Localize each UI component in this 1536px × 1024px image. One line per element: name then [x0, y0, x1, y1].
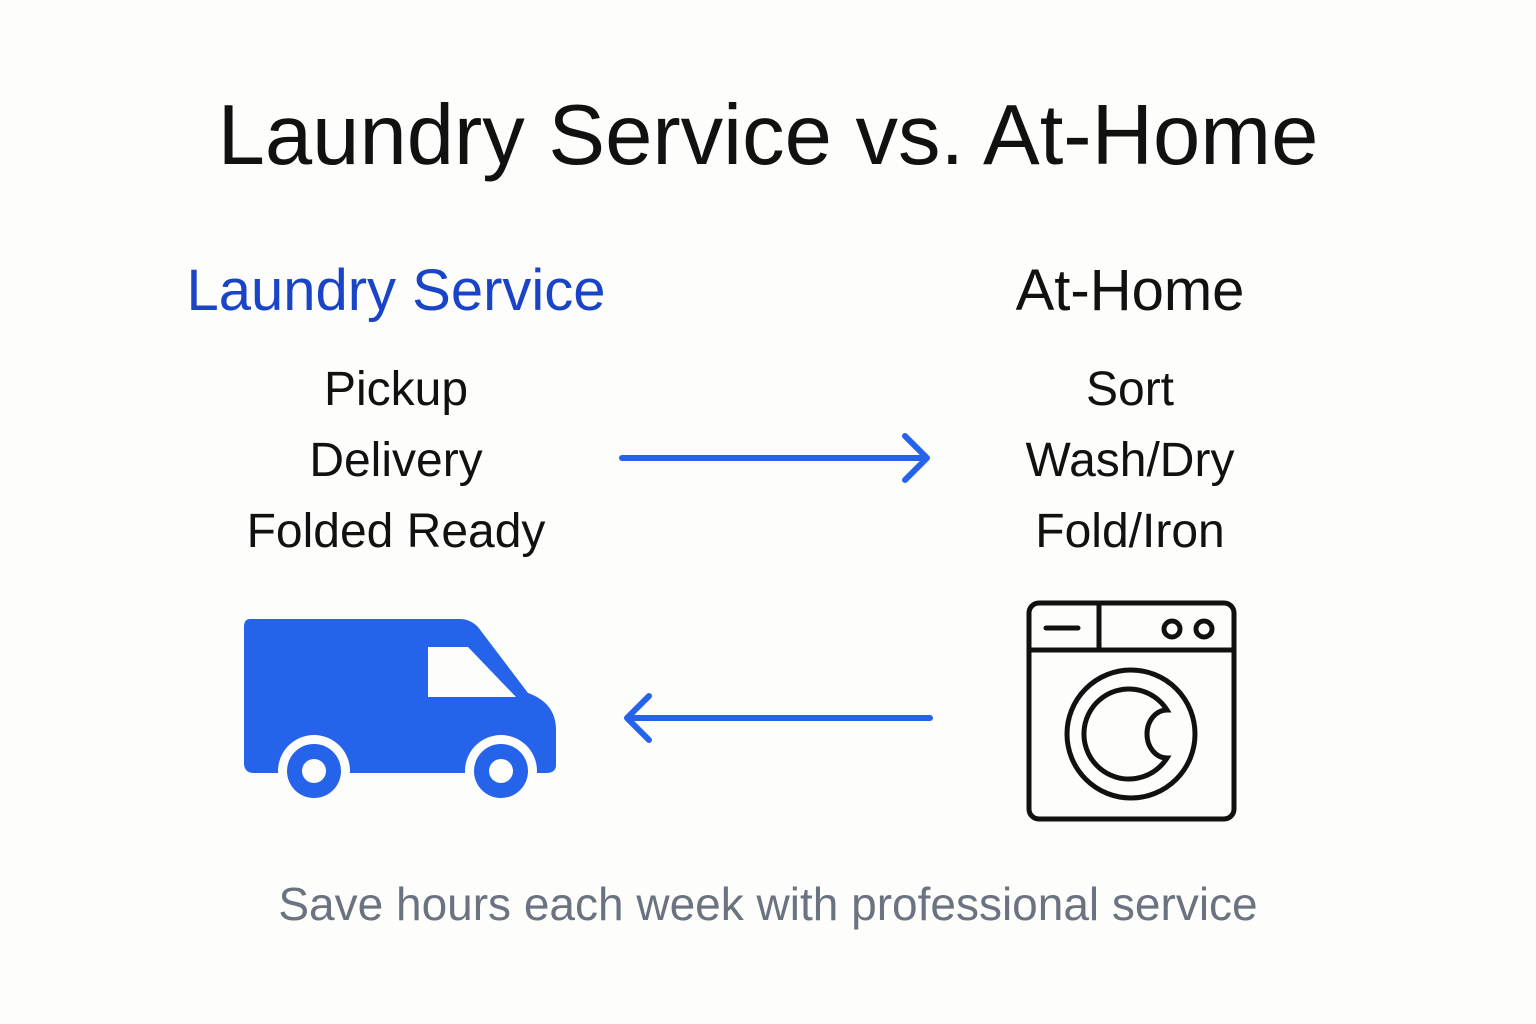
heading: at-home: At-Home	[1016, 258, 1244, 323]
arrow: left	[624, 693, 933, 743]
footer tagline: Save hours each week with professional service	[278, 878, 1258, 930]
icon: delivery van	[244, 619, 556, 798]
title: Laundry Service vs. At-Home	[218, 88, 1318, 183]
list: at-home steps: Sort	[1086, 363, 1174, 416]
list: laundry service steps: Pickup	[324, 363, 468, 416]
list: at-home steps: Wash/Dry	[1026, 434, 1234, 487]
list: at-home steps: Fold/Iron	[1035, 505, 1225, 558]
icon: washing machine	[1026, 600, 1236, 822]
arrow: right	[619, 433, 930, 483]
list: laundry service steps: Folded Ready	[247, 505, 545, 558]
list: at-home steps	[1026, 363, 1234, 558]
heading: laundry service: Laundry Service	[186, 258, 606, 323]
list: laundry service steps: Delivery	[309, 434, 483, 487]
list: laundry service steps	[247, 363, 546, 558]
